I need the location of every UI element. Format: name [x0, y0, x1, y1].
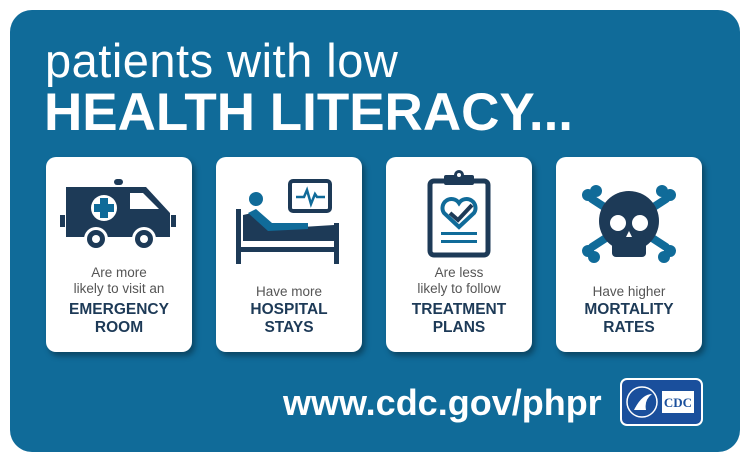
caption	[417, 265, 501, 296]
caption: Are less	[435, 265, 483, 280]
icon: skull and crossbones	[582, 185, 676, 263]
bold caption	[69, 301, 169, 336]
bold caption: STAYS	[264, 319, 314, 336]
bold caption: MORTALITY	[584, 301, 674, 318]
bold caption: RATES	[603, 319, 655, 336]
caption: Have more	[256, 284, 322, 299]
bold caption: TREATMENT	[412, 301, 506, 318]
caption: Are more	[91, 265, 147, 280]
card: emergency room	[46, 157, 192, 352]
title line 1: patients with low	[45, 34, 398, 87]
title line 2: HEALTH LITERACY...	[44, 83, 573, 142]
caption: Have higher	[593, 284, 665, 299]
icon: hospital bed	[236, 179, 339, 264]
url: www.cdc.gov/phpr	[283, 382, 602, 423]
caption	[74, 265, 164, 296]
bold caption: ROOM	[95, 319, 143, 336]
bold caption: PLANS	[433, 319, 485, 336]
icon: clipboard with heart check	[428, 170, 490, 258]
caption: likely to visit an	[74, 281, 164, 296]
bold caption: EMERGENCY	[69, 301, 169, 318]
bold caption	[584, 301, 674, 336]
logo: CDC / HHS: CDC	[664, 395, 692, 410]
icon: ambulance	[60, 179, 176, 248]
card: hospital stays	[216, 157, 362, 352]
logo: CDC / HHS	[620, 378, 703, 426]
card: treatment plans	[386, 157, 532, 352]
caption: likely to follow	[417, 281, 501, 296]
bold caption	[412, 301, 506, 336]
bold caption	[250, 301, 328, 336]
card: mortality rates	[556, 157, 702, 352]
bold caption: HOSPITAL	[250, 301, 328, 318]
